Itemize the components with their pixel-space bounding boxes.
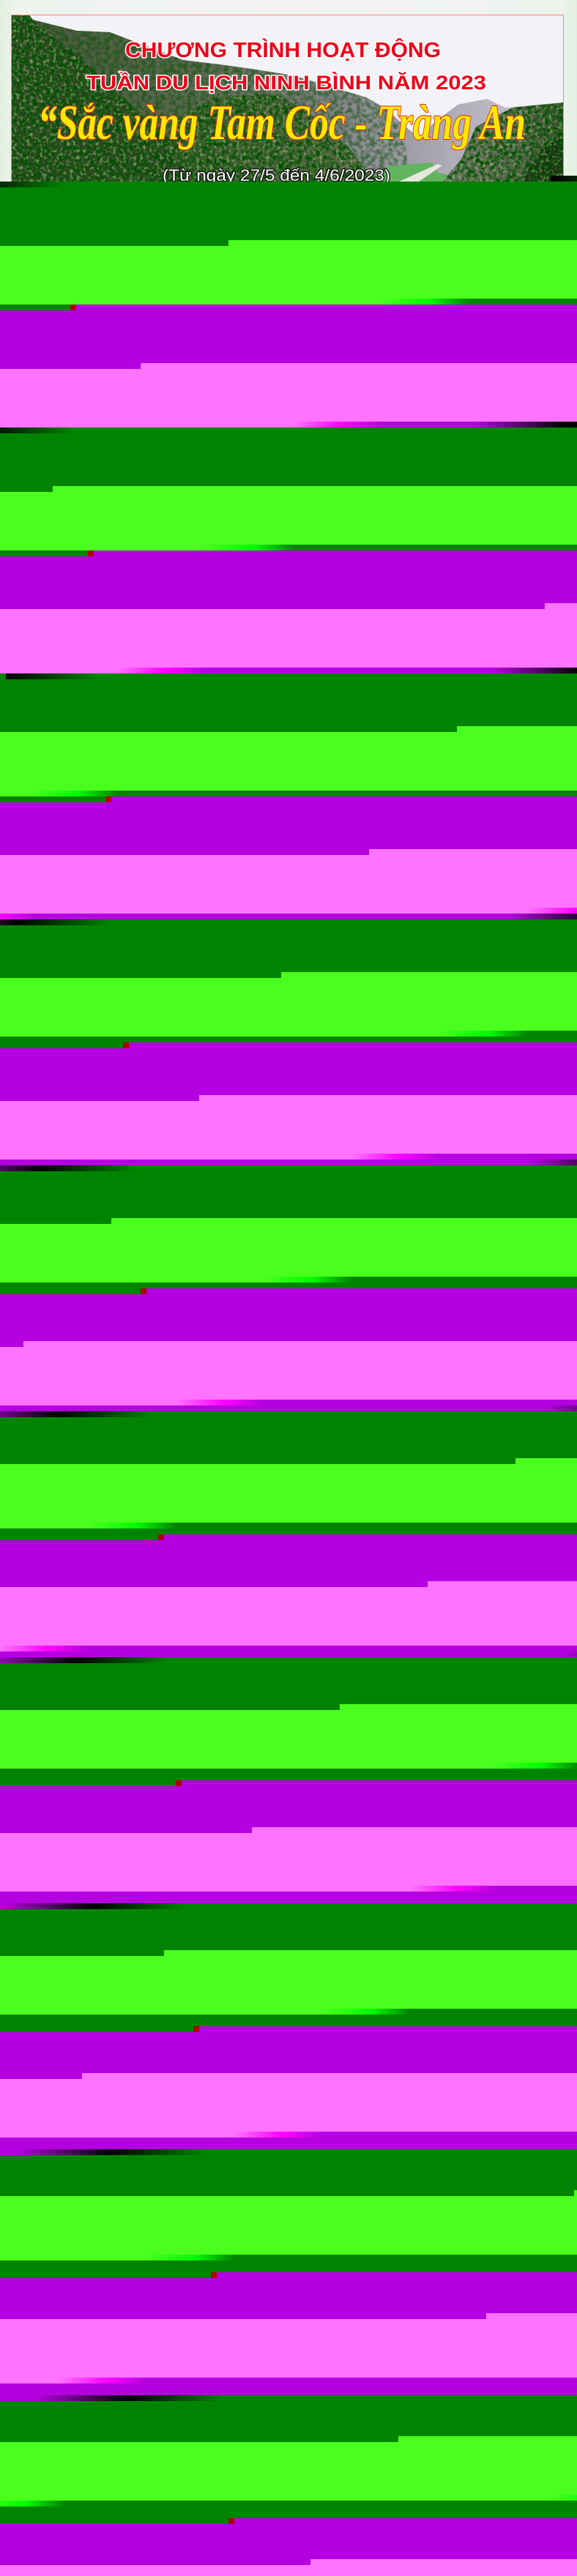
corrupted band cycle 1	[0, 176, 577, 428]
corrupted band cycle 4	[0, 919, 577, 1165]
corrupted band cycle 9	[0, 2149, 577, 2395]
banner: mountain photograph with titles	[12, 15, 564, 184]
corrupted band cycle 8	[0, 1903, 577, 2149]
page background	[0, 0, 577, 182]
mountain landscape	[12, 15, 563, 182]
corrupted band cycle 6	[0, 1411, 577, 1657]
title line 2: TUẦN DU LỊCH NINH BÌNH NĂM 2023	[86, 71, 486, 94]
corrupted band cycle 5	[0, 1165, 577, 1411]
corrupted band cycle 10	[0, 2395, 577, 2576]
date line: (Từ ngày 27/5 đến 4/6/2023)	[163, 166, 390, 184]
corrupted band cycle 7	[0, 1657, 577, 1903]
corrupted band cycle 3	[0, 673, 577, 919]
corrupted band cycle 2	[0, 428, 577, 673]
title line 1: CHƯƠNG TRÌNH HOẠT ĐỘNG	[125, 37, 441, 62]
photo frame	[12, 15, 564, 183]
